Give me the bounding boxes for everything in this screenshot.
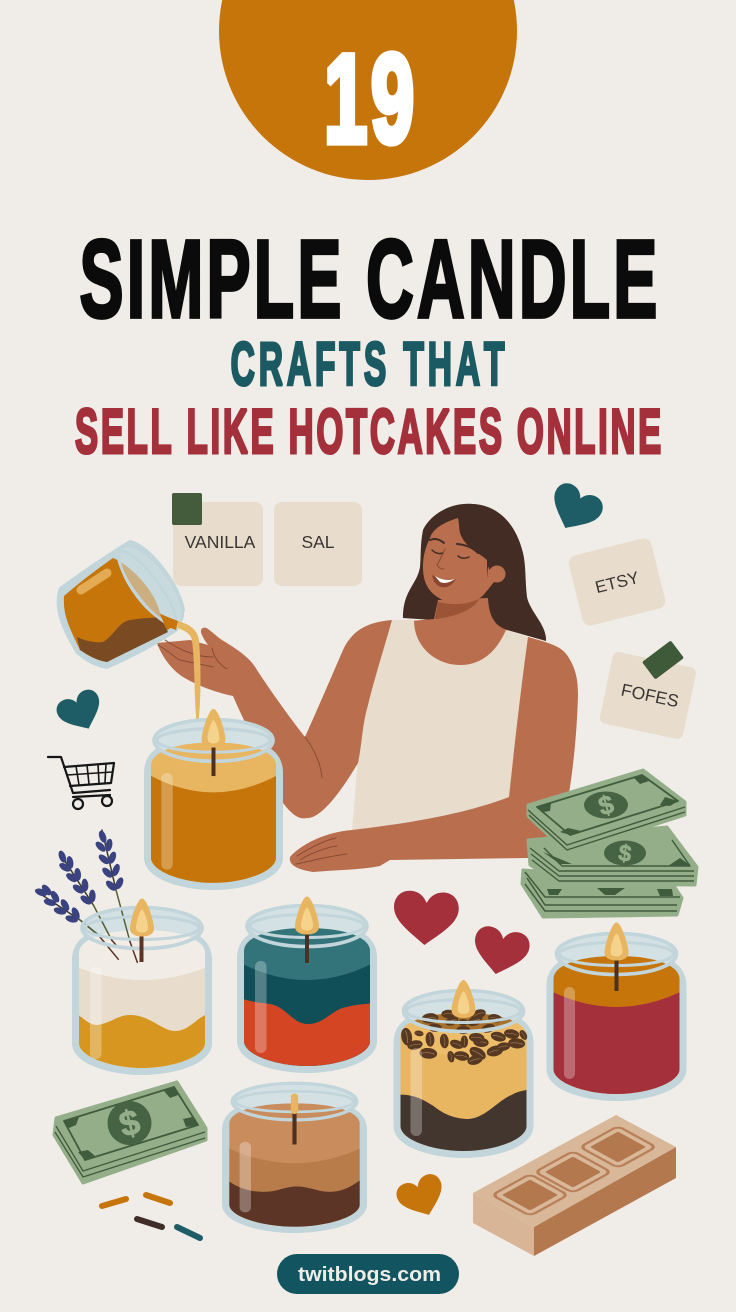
icon: shopping cart (48, 757, 114, 809)
title (75, 219, 664, 467)
left arm and hand (157, 620, 392, 818)
title line: sell like hotcakes online: SELL LIKE HOTCAKES ONLINE (75, 396, 664, 467)
tray cavities (492, 1126, 656, 1216)
label card: fofes: FOFES (619, 680, 681, 711)
money stack: large (522, 770, 697, 917)
icon: teal heart top (543, 479, 607, 539)
pitcher rim (108, 537, 194, 633)
title line: crafts that: CRAFTS THAT (231, 330, 508, 399)
tank top (352, 620, 528, 830)
icon: lavender sprigs (34, 830, 137, 962)
wax melt tray (473, 1115, 676, 1256)
candle: large amber jar (144, 709, 283, 890)
middle stack (528, 827, 697, 885)
smile (432, 575, 456, 587)
hair (403, 504, 546, 641)
middle stack: $ (617, 839, 633, 867)
woman (157, 504, 578, 872)
bottom stack (522, 870, 682, 917)
arm and hand creases (158, 640, 347, 864)
website pill: twitblogs.com (298, 1264, 441, 1286)
money stack: small (54, 1082, 206, 1183)
icon: orange heart (393, 1171, 451, 1224)
title line: simple candle: SIMPLE CANDLE (79, 219, 661, 341)
neck and chest (410, 598, 508, 666)
label card: fofes (599, 640, 697, 740)
label card: vanilla: VANILLA (185, 532, 256, 552)
label card: etsy (567, 537, 667, 627)
icon: teal heart left (53, 686, 109, 738)
icon: pouring pitcher (58, 537, 194, 668)
candle: lavender cream jar (34, 830, 212, 1075)
pitcher glass (58, 541, 184, 668)
number 19: 19 (324, 30, 418, 170)
icon: large red heart (392, 890, 460, 947)
right arm and forearm (290, 637, 578, 872)
number badge circle (219, 0, 517, 180)
green swatch (642, 640, 684, 680)
pitcher highlight (81, 573, 107, 590)
candle: coffee bean jar (394, 980, 534, 1158)
neck shadow (435, 597, 480, 619)
green swatch (172, 493, 202, 525)
label card: sal: SAL (301, 532, 335, 552)
wax melt dashes (102, 1195, 200, 1238)
candle: brown layered jar (222, 1083, 367, 1233)
face (423, 518, 487, 604)
ear (488, 566, 506, 582)
website pill (277, 1254, 459, 1294)
label card: sal (274, 502, 362, 586)
wax pour stream (178, 621, 200, 740)
icon: small red heart (469, 924, 532, 980)
candle: red jar (546, 922, 686, 1101)
top stack (528, 770, 685, 853)
top stack: $ (595, 789, 617, 821)
candle: teal and red jar (237, 896, 377, 1073)
label card: etsy: ETSY (593, 568, 641, 597)
coffee beans (400, 1007, 529, 1066)
label card: vanilla (172, 493, 263, 586)
dark wax layer (77, 617, 168, 662)
wax in pitcher (64, 558, 178, 662)
money stack: small: $ (115, 1102, 144, 1145)
eyes and brows (430, 539, 478, 569)
